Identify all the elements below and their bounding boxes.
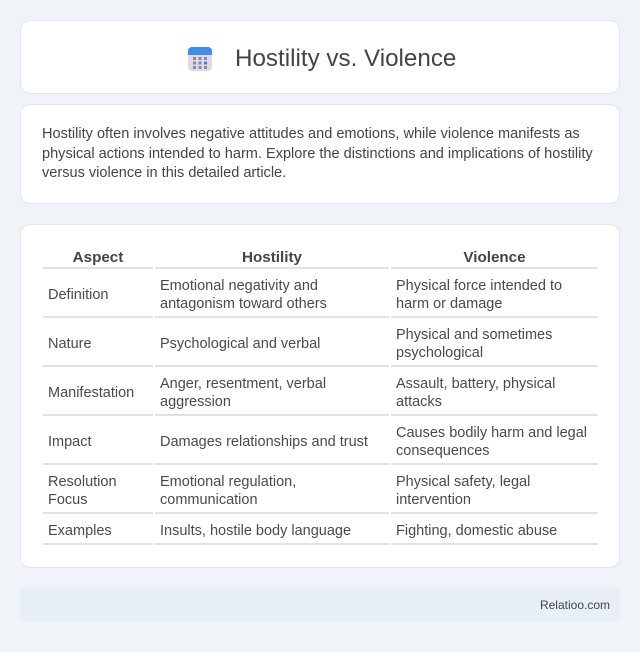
row: manifestation <box>48 376 555 410</box>
row: definition: Physical force intended to <box>396 278 562 294</box>
row: impact: Impact <box>48 434 92 450</box>
row: manifestation: attacks <box>396 394 442 410</box>
row: impact: Damages relationships and trust <box>160 434 368 450</box>
title: Hostility vs. Violence <box>235 45 456 72</box>
panel: introduction <box>20 104 620 204</box>
row: nature: Nature <box>48 336 92 352</box>
heading: hostility: Hostility <box>242 249 302 266</box>
row: examples: Insults, hostile body language <box>160 523 351 539</box>
row: definition: Definition <box>48 287 108 303</box>
row: definition: harm or damage <box>396 296 502 312</box>
row: examples: Examples <box>48 523 112 539</box>
table header <box>73 249 526 266</box>
row: nature: Physical and sometimes <box>396 327 552 343</box>
heading: aspect: Aspect <box>73 249 123 266</box>
heading: violence: Violence <box>463 249 526 266</box>
intro text <box>42 126 593 181</box>
row: resolution focus <box>48 474 530 508</box>
row: nature: Psychological and verbal <box>160 336 320 352</box>
row: impact <box>48 425 587 459</box>
row: manifestation: Assault, battery, physical <box>396 376 555 392</box>
icon: calendar <box>188 47 212 71</box>
row: resolution focus: communication <box>160 492 258 508</box>
panel: comparison table <box>20 224 620 568</box>
row: manifestation: Anger, resentment, verbal <box>160 376 326 392</box>
row: impact: consequences <box>396 443 490 459</box>
row: resolution focus: Emotional regulation, <box>160 474 296 490</box>
row: manifestation: aggression <box>160 394 231 410</box>
intro text: physical actions intended to harm. Explore the distinctions and implications of hostility <box>42 146 593 162</box>
footer credit: Relatioo.com <box>540 598 610 612</box>
row: definition: Emotional negativity and <box>160 278 318 294</box>
row: impact: Causes bodily harm and legal <box>396 425 587 441</box>
intro text: versus violence in this detailed article. <box>42 165 286 181</box>
row: definition <box>48 278 562 312</box>
row: resolution focus: intervention <box>396 492 471 508</box>
row: resolution focus: Physical safety, legal <box>396 474 530 490</box>
row: nature: psychological <box>396 345 483 361</box>
row: definition: antagonism toward others <box>160 296 327 312</box>
row: resolution focus: Focus <box>48 492 88 508</box>
row: examples <box>48 523 557 539</box>
panel: header <box>20 20 620 94</box>
row: resolution focus: Resolution <box>48 474 117 490</box>
footer bar <box>20 588 620 622</box>
row: nature <box>48 327 552 361</box>
row: examples: Fighting, domestic abuse <box>396 523 557 539</box>
intro text: Hostility often involves negative attitudes and emotions, while violence manifests as <box>42 126 580 142</box>
row: manifestation: Manifestation <box>48 385 134 401</box>
